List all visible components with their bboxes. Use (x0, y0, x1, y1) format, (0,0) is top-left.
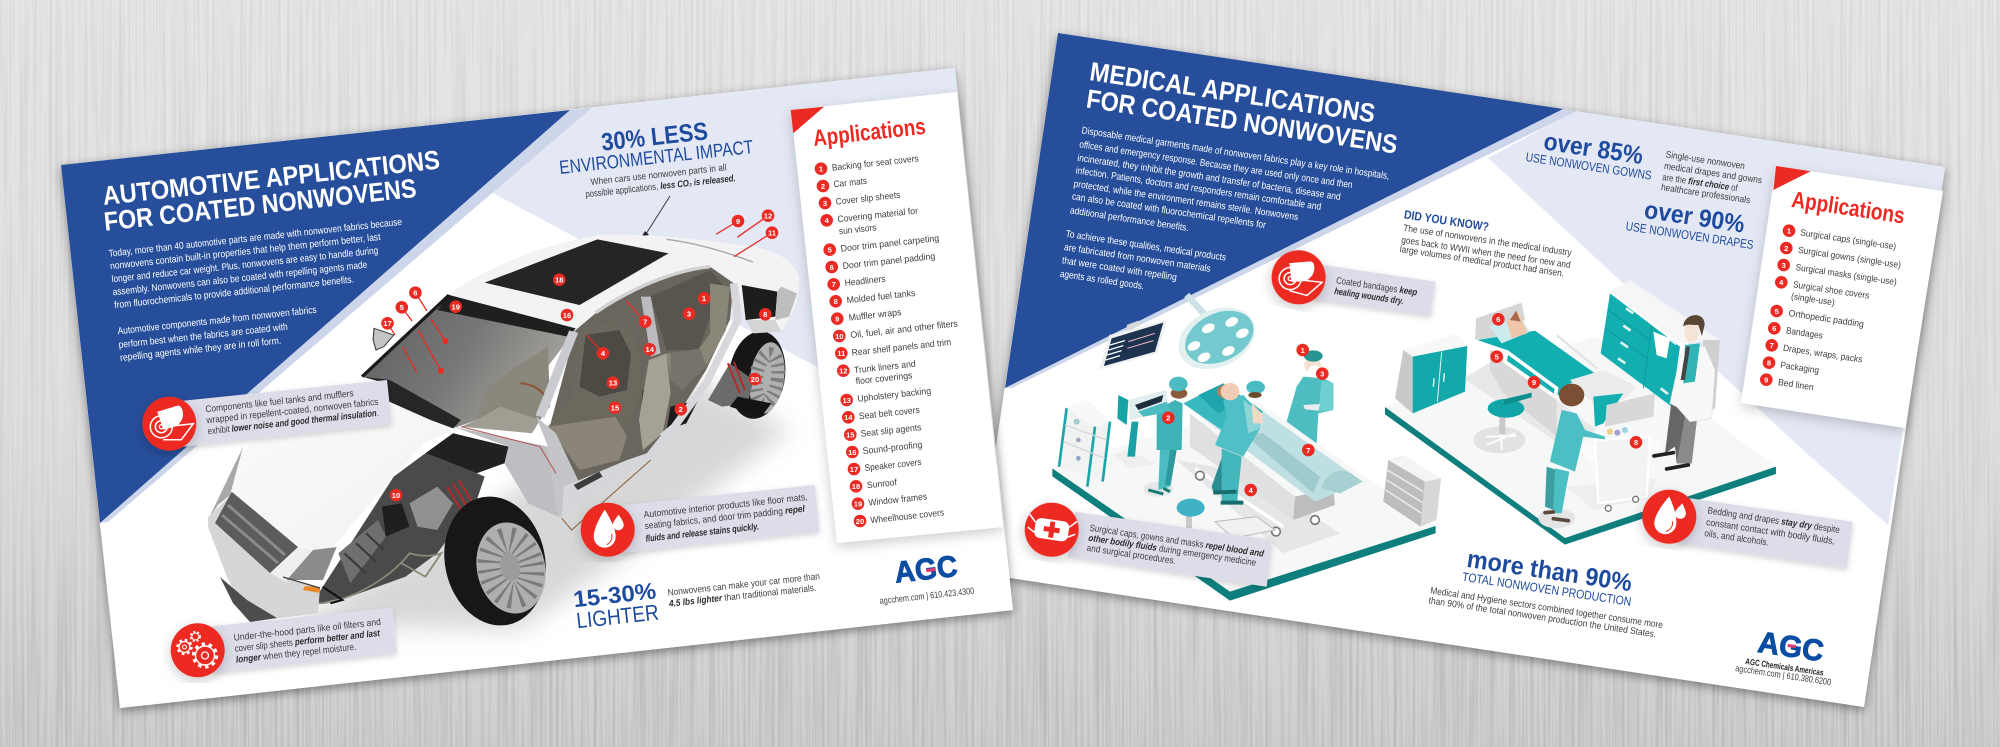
number markers: car: 5 (400, 303, 405, 312)
stat: over 85% nonwoven gowns: USE NONWOVEN GOWNS (1525, 150, 1653, 183)
blue header triangle (1005, 33, 1563, 388)
callout: under-the-hood parts: Under-the-hood parts like oil filters and (233, 616, 381, 643)
B pillar (641, 297, 661, 357)
nurse (1538, 384, 1605, 528)
callout: under-the-hood parts (171, 608, 397, 677)
number markers: car: 20 (751, 375, 759, 384)
icon: fabric roll (142, 397, 196, 451)
list: automotive applications: 1 (819, 164, 824, 174)
diagonal light band (1005, 109, 1577, 388)
heading: automotive title: AUTOMOTIVE APPLICATIONS (101, 145, 441, 211)
list: automotive applications: Door trim panel padding (842, 251, 936, 271)
callout: noise and thermal insulation: exhibit lower noise and good thermal insulation. (207, 407, 379, 436)
list: medical applications: (single-use) (1790, 291, 1835, 307)
rear wheel (723, 328, 791, 422)
list: automotive applications: Door trim panel carpeting (840, 233, 940, 254)
number markers: medical scene: 4 (1249, 486, 1254, 495)
list: automotive applications: 3 (823, 199, 827, 208)
callout: interior products: seating fabrics, and door trim padding repel (644, 503, 806, 531)
stat: over 90% nonwoven drapes (1625, 196, 1755, 252)
surgeon in front of table (1212, 381, 1265, 503)
list: automotive applications: 20 (856, 517, 864, 526)
list: automotive applications: 12 (839, 366, 848, 376)
callout: rolled bandages: Coated bandages keep (1335, 274, 1418, 297)
callout: surgical mask: Surgical caps, gowns and masks repel blood and (1089, 522, 1265, 559)
text block: automotive introduction: nonwovens contain built-in properties that help them perform better, last (110, 232, 381, 272)
list: medical applications: Surgical masks (single-use) (1795, 262, 1897, 287)
text block: automotive introduction (108, 217, 403, 364)
illustration: hospital room (1385, 280, 1776, 545)
rear lamp and arch (742, 285, 777, 320)
text block: medical introduction: incinerated, they inhibit the growth and transfer of bacteria, disease and (1077, 153, 1341, 203)
stat: over 90% nonwoven drapes: over 90% (1642, 196, 1746, 239)
heading: applications: Applications (812, 113, 927, 151)
rear window area (651, 270, 722, 350)
text block: medical introduction: that were coated with repelling (1061, 255, 1178, 283)
list: automotive applications: 2 (821, 182, 825, 191)
number markers: car: 8 (763, 310, 767, 319)
stat: more than 90% total production: more than 90% (1465, 545, 1634, 597)
number markers: car: 7 (643, 318, 647, 326)
text block: medical introduction: are fabricated from nonwoven materials (1063, 242, 1211, 275)
interior base (548, 267, 734, 483)
list: automotive applications: 13 (842, 396, 851, 405)
icon: fabric roll (1267, 245, 1331, 309)
text block: first choice: Single-use nonwoven (1665, 148, 1746, 171)
callout: surgical mask: other bodily fluids during emergency medicine (1088, 532, 1257, 568)
list: medical applications: Drapes, wraps, packs (1782, 343, 1863, 365)
door sill (562, 433, 674, 517)
stat: over 90% nonwoven drapes: USE NONWOVEN DRAPES (1625, 219, 1755, 252)
ground shadow (290, 380, 790, 630)
heading: medical title: MEDICAL APPLICATIONS (1088, 56, 1377, 129)
icon: water drops (1639, 486, 1700, 547)
number markers: car: 9 (736, 217, 740, 226)
list: medical applications: Bed linen (1777, 377, 1814, 392)
sheet paper (61, 68, 1013, 708)
illustration: operating room (1052, 295, 1441, 601)
text block: first choice (1660, 148, 1763, 205)
logo: AGC Chemicals Americas: agcchem.com | 610.380.6200 (1735, 663, 1832, 687)
logo: AGC Chemicals Americas (1735, 626, 1832, 687)
black engine cover (425, 433, 508, 473)
list: automotive applications: Headliners (844, 274, 886, 288)
number markers: car: 4 (601, 349, 606, 358)
blue header triangle (61, 110, 570, 523)
number markers: car (381, 209, 778, 501)
list: automotive applications: Muffler wraps (848, 307, 902, 323)
list: automotive applications: 10 (835, 332, 844, 341)
number markers: medical scene: 2 (1166, 414, 1170, 422)
right wall rack (1383, 455, 1441, 527)
callout: rolled bandages: healing wounds dry. (1334, 285, 1405, 306)
stat: 30% less environmental impact: 30% LESS (600, 117, 709, 157)
list: automotive applications: Covering material for (837, 206, 918, 224)
heading: applications: Applications (1790, 186, 1907, 228)
list: medical applications (1760, 224, 1902, 392)
heading: automotive title: FOR COATED NONWOVENS (102, 173, 418, 237)
heading: medical title: FOR COATED NONWOVENS (1085, 84, 1399, 160)
surgeon at console (1138, 377, 1188, 497)
callout: bedding stays dry: Bedding and drapes stay dry despite (1707, 504, 1841, 535)
text block: automotive introduction: Today, more than 40 automotive parts are made with nonwoven fabrics because (108, 217, 403, 260)
list: automotive applications: Oil, fuel, air and other filters (850, 318, 959, 340)
surgeon behind table (1287, 350, 1333, 443)
list: medical applications: 6 (1772, 324, 1776, 333)
list: medical applications: 8 (1767, 358, 1771, 368)
list: automotive applications: 8 (834, 297, 838, 306)
list: medical applications: 5 (1775, 307, 1780, 316)
fender (453, 427, 558, 517)
surgical lamp (1168, 295, 1265, 381)
callout: bedding stays dry: oils, and alcohols. (1704, 527, 1770, 548)
list: medical applications: Surgical gowns (single-use) (1797, 245, 1902, 270)
callout: under-the-hood parts: longer when they repel moisture. (235, 641, 357, 665)
callout: bedding stays dry (1639, 486, 1853, 568)
floor between seats (639, 390, 663, 427)
list: medical applications: Orthopedic padding (1788, 308, 1865, 329)
list: automotive applications: Molded fuel tanks (846, 288, 916, 305)
list: automotive applications: 18 (852, 482, 860, 491)
list: medical applications: Surgical shoe covers (1792, 279, 1870, 301)
stat: over 85% nonwoven gowns: over 85% (1542, 128, 1645, 170)
text block: automotive introduction: assembly. Nonwovens can also be coated with repelling agents made (112, 260, 368, 298)
logo: AGC Chemicals Americas: AGC Chemicals Americas (1745, 656, 1824, 678)
text block: medical introduction: Disposable medical garments made of nonwoven fabrics play a key role in hospitals, (1081, 125, 1390, 182)
list: automotive applications: Sound-proofing (862, 440, 923, 456)
text block: medical introduction: additional performance benefits. (1069, 205, 1189, 234)
list: medical applications: Surgical caps (single-use) (1800, 227, 1897, 252)
front wheel (433, 487, 557, 635)
console (1113, 390, 1168, 468)
operating table (1183, 383, 1363, 536)
logo: AGC (879, 550, 975, 606)
panel: automotive sheet (61, 68, 1013, 708)
list: medical applications: 4 (1779, 278, 1784, 287)
bedside desk (1570, 370, 1655, 427)
logo: AGC: AGC (893, 550, 959, 590)
storage cabinet (1395, 333, 1467, 413)
callout: under-the-hood parts: cover slip sheets perform better and last (234, 627, 381, 654)
callout: noise and thermal insulation (142, 380, 392, 451)
text block: first choice: medical drapes and gowns (1663, 160, 1763, 185)
list: automotive applications: Seat belt covers (858, 405, 921, 421)
list: automotive applications: 16 (848, 448, 857, 457)
list: automotive applications (815, 153, 959, 527)
text block: first choice: are the first choice of (1662, 171, 1739, 193)
light blue background area (1488, 111, 1945, 525)
list: medical applications: 3 (1782, 261, 1786, 270)
text block: automotive introduction: longer and reduce car weight. Plus, nonwovens are easy to handle during (111, 245, 379, 285)
rear seat (667, 283, 730, 390)
list: automotive applications: 6 (830, 263, 834, 272)
windshield header (437, 295, 576, 337)
list: medical applications: 9 (1764, 376, 1768, 384)
front seat (548, 322, 641, 470)
number markers: medical scene: 1 (1301, 346, 1306, 355)
number markers: car: 19 (451, 302, 460, 312)
list: automotive applications: sun visors (838, 222, 877, 236)
list: automotive applications: floor coverings (855, 370, 913, 386)
left shelf (1058, 400, 1112, 487)
wall monitor (1099, 320, 1167, 369)
list: automotive applications: Cover slip sheets (835, 190, 901, 207)
icon: gears (171, 623, 225, 677)
number markers: car: 11 (768, 228, 777, 238)
lower A pillar fill (536, 417, 580, 517)
text block: automotive introduction: repelling agents while they are in roll form. (120, 336, 282, 364)
wall cabinet (1601, 280, 1720, 420)
list: medical applications: 1 (1787, 226, 1792, 236)
number markers: medical scene: 7 (1306, 446, 1310, 455)
antenna (646, 196, 670, 234)
text block: did you know: large volumes of medical product had arisen. (1399, 243, 1565, 279)
icon: water drops (581, 503, 635, 557)
exam stool (1473, 393, 1532, 453)
number markers: car: 2 (679, 405, 683, 414)
stat: more than 90% total production: Medical and Hygiene sectors combined together consume more (1430, 584, 1664, 630)
list: automotive applications: Speaker covers (864, 457, 922, 473)
red corner (791, 107, 824, 133)
stat: more than 90% total production (1428, 545, 1664, 639)
list: automotive applications: Seat slip agents (860, 422, 922, 439)
panel: medical applications list (1741, 166, 1943, 428)
text block: medical introduction: agents as rolled goods. (1059, 269, 1145, 292)
list: automotive applications: 4 (825, 216, 830, 225)
number markers: car: 6 (413, 288, 418, 298)
light blue background area (491, 68, 998, 465)
stool (1177, 499, 1205, 528)
list: automotive applications: 17 (850, 465, 858, 474)
red corner (1773, 166, 1811, 190)
list: automotive applications: Backing for seat covers (831, 153, 919, 173)
mirror (373, 328, 394, 350)
callout: noise and thermal insulation: Components like fuel tanks and mufflers (205, 387, 354, 414)
front fascia (208, 447, 337, 622)
callout: noise and thermal insulation: wrapped in repellent-coated, nonwoven fabrics (205, 396, 379, 425)
stat: 15-30% lighter: 15-30% (572, 577, 657, 612)
list: automotive applications: Car mats (833, 176, 868, 189)
callout: surgical mask: and surgical procedures. (1086, 542, 1177, 566)
door frames (663, 283, 738, 437)
text block: medical introduction (1059, 125, 1390, 292)
number markers: medical scene: 3 (1320, 370, 1324, 378)
list: automotive applications: Upholstery backing (857, 386, 931, 404)
stat: 15-30% lighter: 4.5 lbs lighter than traditional materials. (667, 582, 817, 609)
list: medical applications: Bandages (1785, 325, 1824, 341)
callout: interior products (581, 485, 819, 557)
sunroof (485, 239, 669, 305)
number markers: medical scene: 5 (1495, 352, 1500, 362)
pointer dots (442, 338, 448, 344)
stat: 15-30% lighter: Nonwovens can make your car more than (667, 570, 820, 598)
list: medical applications: 7 (1770, 341, 1774, 350)
stat: more than 90% total production: TOTAL NONWOVEN PRODUCTION (1461, 570, 1632, 609)
list: automotive applications: 7 (832, 280, 836, 289)
number markers: car: 1 (702, 294, 707, 303)
text block: did you know (1399, 207, 1573, 279)
list: automotive applications: 9 (835, 314, 839, 324)
illustration: cutaway car (208, 196, 799, 635)
number markers: car: 3 (687, 310, 691, 318)
stat: more than 90% total production: than 90% of the total nonwoven production the United States. (1428, 594, 1657, 639)
number markers: car: 17 (383, 319, 392, 328)
diagonal light band (100, 108, 592, 523)
stat: over 85% nonwoven gowns (1525, 128, 1653, 183)
instrument tray (1215, 517, 1275, 538)
text block: did you know: goes back to WWII when the need for new and (1401, 234, 1571, 270)
roof and trunk (449, 235, 799, 332)
list: automotive applications: 15 (846, 430, 855, 440)
hood (226, 402, 453, 557)
stat: 15-30% lighter (572, 570, 820, 633)
list: automotive applications: 5 (828, 246, 833, 254)
number markers: medical scene: 8 (1634, 438, 1638, 447)
list: automotive applications: Wheelhouse covers (870, 507, 945, 525)
text block: medical introduction: To achieve these qualities, medical products (1065, 229, 1227, 264)
dashboard seen through glass (477, 347, 550, 420)
number markers: car: 18 (555, 276, 564, 284)
panel: automotive applications list (791, 92, 1003, 543)
logo: AGC Chemicals Americas: AGC (1756, 626, 1826, 668)
callout: interior products: Automotive interior products like floor mats, (643, 491, 808, 520)
cowl (362, 377, 461, 428)
stat: 15-30% lighter: LIGHTER (575, 599, 660, 633)
list: medical applications: Packaging (1780, 360, 1820, 375)
list: automotive applications: 11 (837, 349, 846, 358)
stat: 30% less environmental impact (558, 117, 755, 199)
callout: rolled bandages (1267, 245, 1436, 316)
number markers: car: 13 (609, 378, 617, 388)
text block: automotive introduction: Automotive components made from nonwoven fabrics (117, 305, 317, 337)
number markers: car: 10 (392, 491, 400, 500)
list: automotive applications: Rear shelf panels and trim (851, 337, 952, 358)
icon: surgical mask (1021, 499, 1082, 560)
text block: did you know: The use of nonwovens in the medical industry (1403, 222, 1573, 258)
medical cart (1567, 427, 1663, 511)
hospital bed (1475, 303, 1597, 437)
number markers: medical scene: 9 (1532, 378, 1536, 387)
callout: interior products: fluids and release stains quickly. (645, 520, 760, 544)
list: automotive applications: 14 (844, 413, 853, 422)
number markers: car: 15 (611, 404, 620, 412)
number markers: car: 14 (645, 345, 655, 354)
sheet paper (977, 33, 1945, 707)
car body, cabin and glass (319, 235, 799, 603)
stat: 30% less environmental impact: ENVIRONMENTAL IMPACT (558, 137, 755, 179)
stat: 30% less environmental impact: When cars use nonwoven parts in all (590, 161, 727, 187)
pointer lines (388, 216, 772, 372)
number markers: car: 16 (563, 311, 571, 320)
text block: medical introduction: infection. Patients, doctors and responders remain comfortable and (1075, 165, 1322, 213)
list: medical applications: 2 (1784, 244, 1788, 253)
text block: medical introduction: offices and emergency response. Because they are used only once and then (1079, 139, 1353, 191)
text block: medical introduction: protected, while the environment remains sterile. Nonwovens (1073, 179, 1299, 223)
doctor (1654, 315, 1715, 469)
list: automotive applications: 19 (854, 500, 862, 508)
callout: bedding stays dry: constant contact with bodily fluids, (1705, 516, 1836, 546)
open rear door (639, 353, 671, 450)
stat: 30% less environmental impact: possible applications, less CO₂ is released. (585, 172, 736, 199)
logo: AGC: agcchem.com | 610.423.4300 (879, 586, 975, 606)
list: automotive applications: Trunk liners and (853, 359, 916, 375)
number markers: medical scene: 6 (1496, 315, 1500, 324)
text block: automotive introduction: perform best when the fabrics are coated with (118, 322, 288, 351)
number markers: medical scene (1162, 313, 1642, 496)
windshield (362, 295, 576, 428)
rear suspension (708, 363, 754, 407)
list: automotive applications: Window frames (868, 491, 928, 508)
list: automotive applications: Sunroof (866, 477, 898, 490)
text block: medical introduction: can also be coated with fluorochemical repellents for (1071, 191, 1267, 231)
text block: first choice: healthcare professionals (1660, 181, 1751, 205)
number markers: car: 12 (764, 212, 772, 220)
text block: did you know: DID YOU KNOW? (1403, 207, 1490, 234)
text block: automotive introduction: from fluorochemicals to provide additional performance benefits. (114, 274, 355, 311)
floor mat rear (667, 400, 698, 430)
engine bay (319, 453, 485, 603)
callout: surgical mask (1021, 499, 1272, 587)
panel: medical sheet (977, 33, 1945, 707)
